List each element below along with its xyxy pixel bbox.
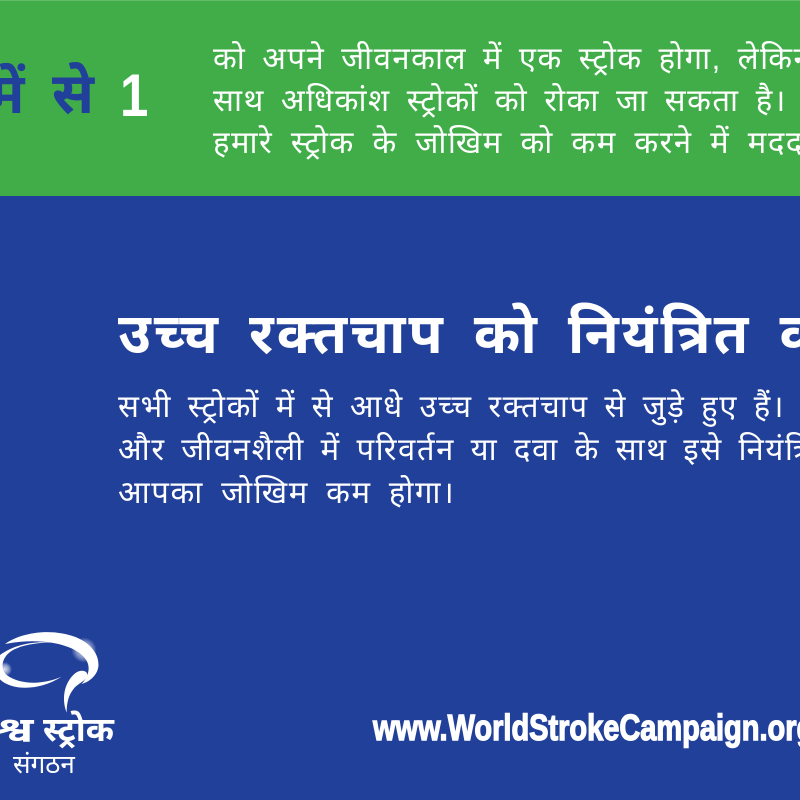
logo wordmark xyxy=(0,710,114,749)
logo: World Stroke Organization xyxy=(0,632,114,779)
body text: आपका जोखिम कम होगा। xyxy=(118,475,455,510)
statistic: one in four: से xyxy=(52,62,94,126)
statistic: one in four: 1 xyxy=(120,62,148,129)
icon: brain swoosh xyxy=(0,632,98,712)
logo subtitle: संगठन xyxy=(13,749,75,779)
logo wordmark: स्ट्रोक xyxy=(43,711,114,749)
header text xyxy=(213,41,800,160)
statistic: one in four xyxy=(0,62,148,129)
header text: हमारे स्ट्रोक के जोखिम को कम करने में मदद xyxy=(213,125,800,160)
header text: साथ अधिकांश स्ट्रोकों को रोका जा सकता है। xyxy=(213,83,787,118)
body text xyxy=(118,389,800,510)
header text: को अपने जीवनकाल में एक स्ट्रोक होगा, लेकिन xyxy=(213,41,800,76)
panel: green header band xyxy=(0,0,800,196)
